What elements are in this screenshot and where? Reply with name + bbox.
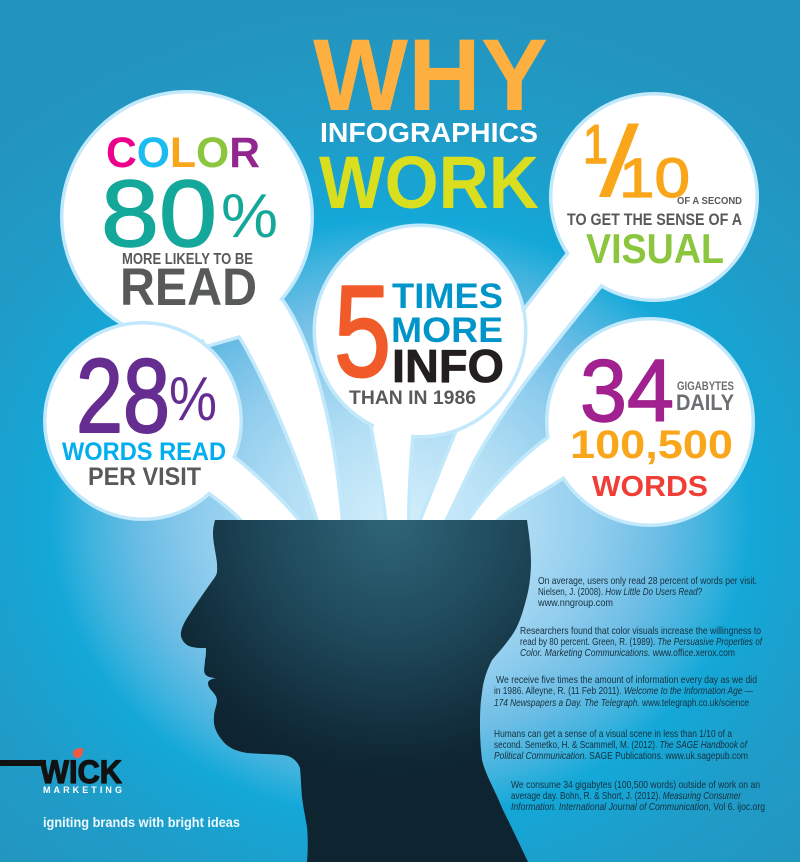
stat: percent sign: % bbox=[169, 365, 217, 434]
text block: 28 percent bbox=[62, 338, 226, 491]
label: words: WORDS bbox=[592, 471, 708, 503]
label: read: READ bbox=[120, 258, 257, 317]
source: five times information: 174 Newspapers a Day. The Telegraph. www.telegraph.co.uk/science bbox=[494, 698, 749, 709]
title bbox=[313, 18, 548, 224]
stat: slash: / bbox=[599, 106, 639, 218]
text block: sources bbox=[494, 576, 765, 813]
stat: 5: 5 bbox=[334, 258, 391, 404]
label: to get the sense of a: TO GET THE SENSE OF A bbox=[567, 211, 742, 229]
label: visual: VISUAL bbox=[586, 225, 724, 272]
icon: head silhouette bbox=[181, 520, 531, 862]
source: 34 gigabytes: average day. Bohn, R. & Short, J. (2012). Measuring Consumer bbox=[511, 791, 741, 802]
panel: 28 percent bubble shape bbox=[46, 324, 301, 525]
label: per visit: PER VISIT bbox=[88, 463, 201, 491]
tagline: igniting brands with bright ideas bbox=[43, 815, 240, 830]
source: words per visit: www.nngroup.com bbox=[537, 598, 613, 609]
source: visual scene: second. Semetko, H. & Scammell, M. (2012). The SAGE Handbook of bbox=[494, 740, 748, 751]
source: 34 gigabytes: Information. International Journal of Communication, Vol 6. ijoc.org bbox=[511, 802, 765, 813]
stat: 100,500: 100,500 bbox=[570, 423, 733, 467]
source: 34 gigabytes: We consume 34 gigabytes (100,500 words) outside of work on an bbox=[511, 780, 760, 791]
label: of a second: OF A SECOND bbox=[677, 195, 742, 207]
stat: percent sign: % bbox=[221, 182, 278, 251]
source: words per visit: On average, users only read 28 percent of words per visit. bbox=[538, 576, 757, 587]
stat: 28: 28 bbox=[76, 338, 170, 455]
source: five times information bbox=[494, 675, 757, 709]
source: five times information: We receive five times the amount of information every day as we did bbox=[496, 675, 757, 686]
source: words per visit bbox=[537, 576, 757, 609]
panel: 34 gigabytes bubble shape bbox=[467, 320, 752, 525]
panel: five times bubble shape bbox=[316, 227, 524, 525]
source: color visuals: Researchers found that color visuals increase the willingness to bbox=[520, 626, 761, 637]
title word: infographics: INFOGRAPHICS bbox=[320, 117, 538, 148]
source: visual scene bbox=[494, 729, 748, 762]
text block: one tenth of a second bbox=[567, 106, 742, 272]
logo: wick marketing bbox=[0, 748, 122, 795]
stat: 80: 80 bbox=[101, 161, 217, 267]
source: color visuals: Color. Marketing Communications. www.office.xerox.com bbox=[520, 648, 735, 659]
text block: color 80 percent bbox=[101, 129, 278, 317]
source: words per visit: Nielsen, J. (2008). How Little Do Users Read? bbox=[538, 587, 702, 598]
label: than in 1986: THAN IN 1986 bbox=[349, 387, 476, 409]
title word: why: WHY bbox=[313, 18, 548, 132]
source: color visuals: read by 80 percent. Green, R. (1989). The Persuasive Properties of bbox=[520, 637, 763, 648]
label: daily: DAILY bbox=[676, 390, 734, 415]
label: info: INFO bbox=[392, 340, 504, 392]
label: more likely to be: MORE LIKELY TO BE bbox=[122, 251, 253, 268]
source: color visuals bbox=[520, 626, 763, 659]
panel: one tenth bubble shape bbox=[420, 96, 756, 525]
stat: denominator: 10 bbox=[619, 146, 690, 209]
stat: numerator: 1 bbox=[583, 113, 608, 175]
title word: work: WORK bbox=[319, 141, 539, 224]
logo wordmark: WICK bbox=[40, 754, 122, 790]
panel: color bubble shape bbox=[64, 94, 341, 525]
logo subtitle: MARKETING bbox=[43, 785, 122, 795]
label: gigabytes: GIGABYTES bbox=[677, 381, 734, 393]
stat: 34: 34 bbox=[580, 341, 674, 440]
text block: 34 gigabytes bbox=[570, 341, 734, 503]
label: times: TIMES bbox=[392, 277, 503, 316]
label: words read: WORDS READ bbox=[62, 438, 226, 466]
source: 34 gigabytes bbox=[511, 780, 765, 813]
heading: color: COLOR bbox=[106, 129, 260, 177]
label: more: MORE bbox=[391, 311, 503, 350]
source: five times information: in 1986. Alleyne, R. (11 Feb 2011). Welcome to the Information Age — bbox=[494, 686, 754, 697]
source: visual scene: Political Communication. SAGE Publications. www.uk.sagepub.com bbox=[494, 751, 748, 762]
logo bar bbox=[0, 760, 46, 766]
source: visual scene: Humans can get a sense of a visual scene in less than 1/10 of a bbox=[494, 729, 732, 740]
icon: flame dot bbox=[73, 748, 83, 758]
text block: five times more info bbox=[334, 258, 504, 409]
